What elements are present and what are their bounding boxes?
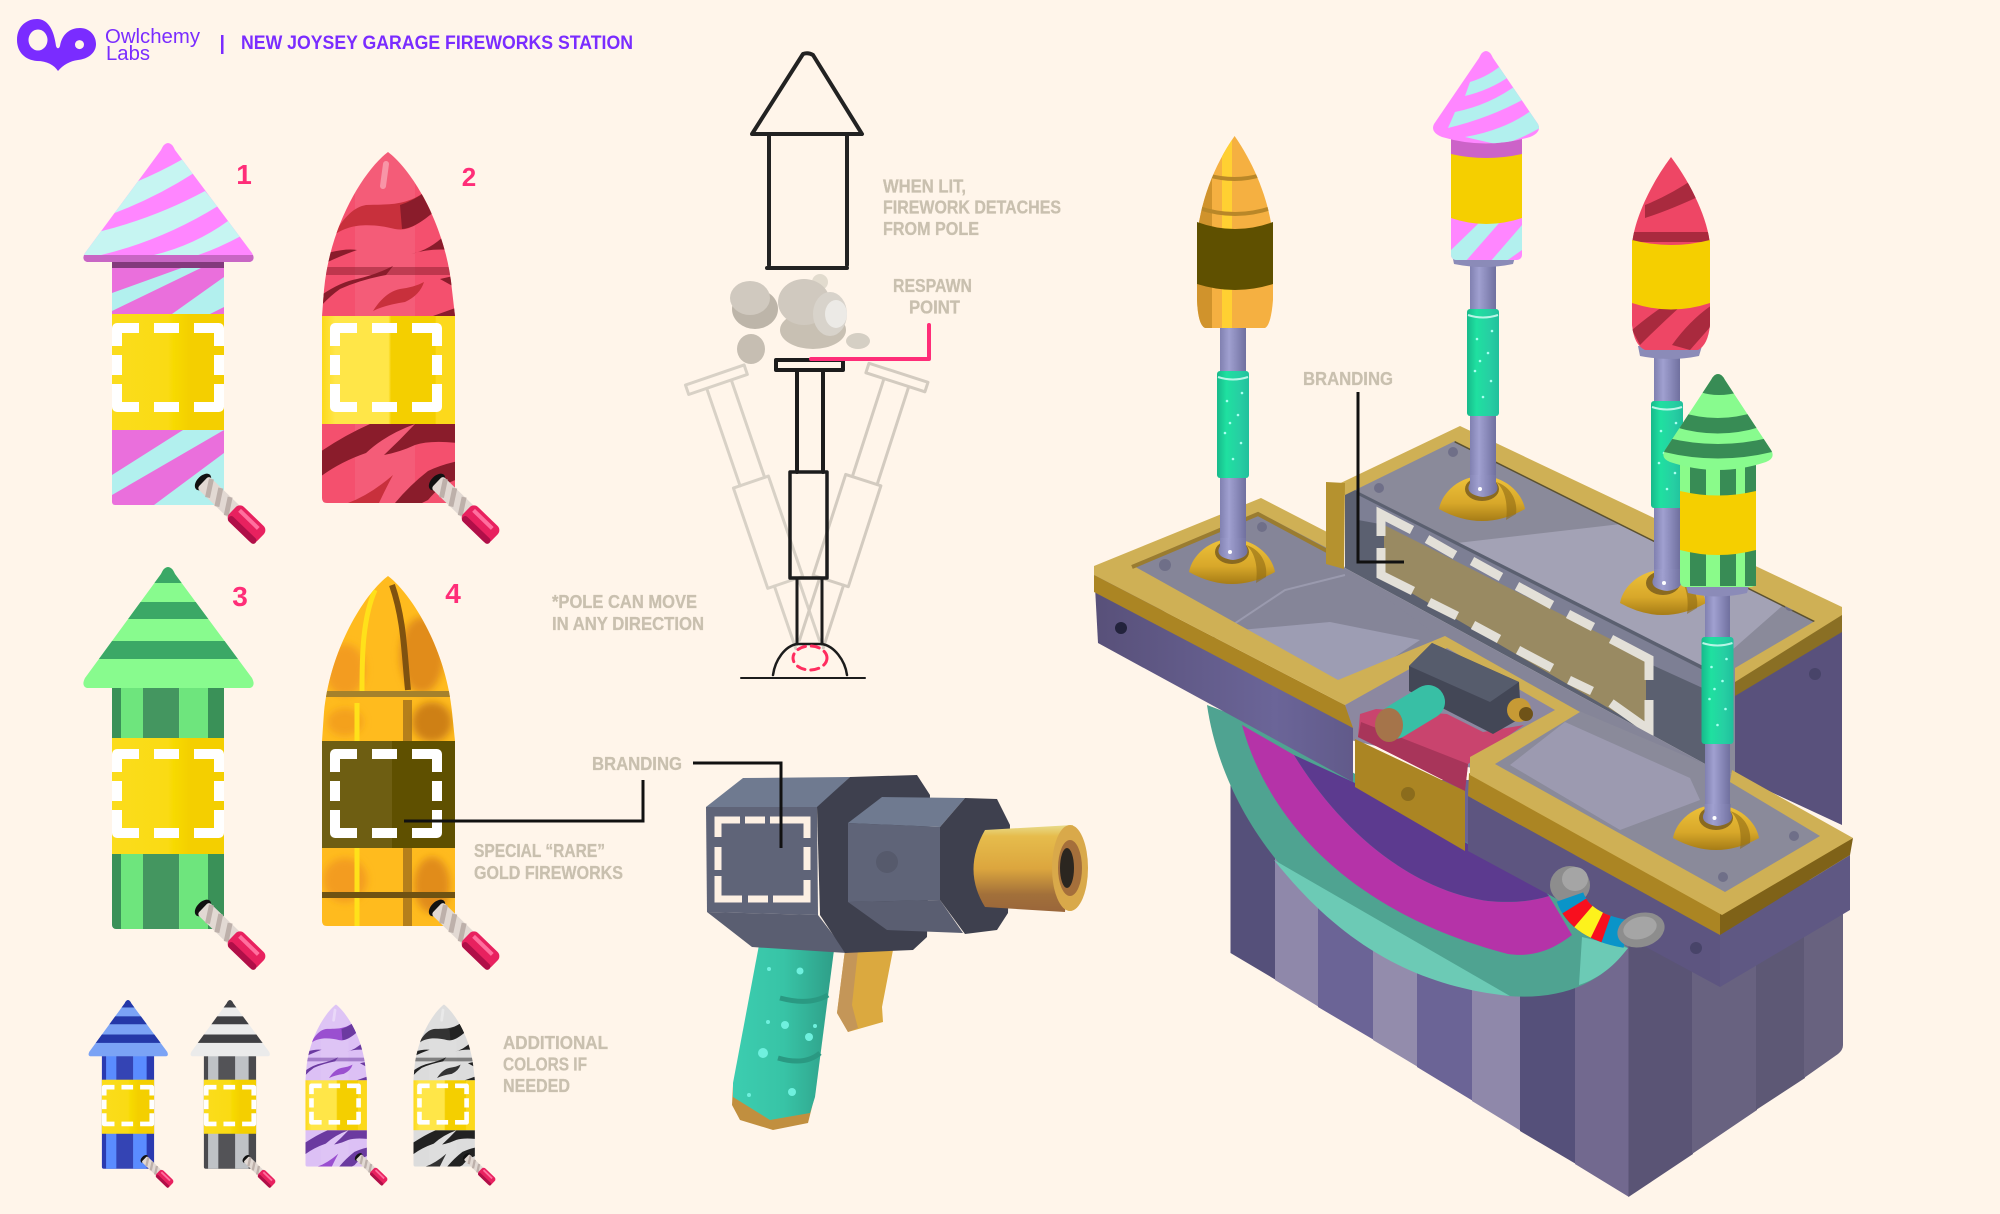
- title: NEW JOYSEY GARAGE FIREWORKS STATION: [241, 33, 633, 54]
- station rocket: pink on pole: [1433, 51, 1539, 521]
- station: deck backing along riser foot: [1345, 568, 1707, 770]
- note: when lit: WHEN LIT,: [883, 177, 966, 197]
- note: respawn point: RESPAWN: [893, 276, 972, 296]
- sketch: detached firework outline: [752, 53, 862, 268]
- gun: trigger: [837, 950, 893, 1032]
- firework launcher gun: [706, 775, 1088, 1130]
- sketch: ghost pole tilted right: [781, 363, 928, 654]
- station: left side face: [1094, 568, 1353, 782]
- station: gold frame: [1094, 426, 1853, 935]
- note: special rare gold fireworks: GOLD FIREWORKS: [474, 863, 623, 883]
- number 3: 3: [232, 581, 248, 612]
- callout line: gun branding: [693, 763, 781, 848]
- number 2: 2: [462, 162, 476, 192]
- station: notch and red firing pad: [1345, 646, 1560, 791]
- small variant: blue rocket: [87, 997, 175, 1188]
- note: additional colors: NEEDED: [503, 1076, 570, 1096]
- gun: mid block with screw: [848, 797, 1010, 934]
- callout line: station branding: [1358, 392, 1404, 562]
- note: pole can move: IN ANY DIRECTION: [552, 614, 704, 634]
- small variant: purple tiger rocket: [305, 1004, 389, 1186]
- station: mini launcher gun: [1375, 643, 1533, 742]
- note: additional colors: ADDITIONAL: [503, 1033, 608, 1053]
- station: gold drawer: [1355, 739, 1465, 851]
- station: left deck surface: [1100, 503, 1450, 705]
- firework station: [1094, 45, 1853, 1197]
- firework 3: green striped rocket: [80, 560, 268, 971]
- note: special rare gold fireworks: [474, 841, 623, 883]
- logo: Owlchemy Labs: Labs: [106, 43, 150, 65]
- note: additional colors: [503, 1033, 608, 1096]
- station: branding panel riser: [1345, 485, 1707, 765]
- note: special rare gold fireworks: SPECIAL “RARE”: [474, 841, 605, 861]
- note: branding on firework: BRANDING: [592, 754, 682, 774]
- station rocket: red on pole: [1620, 150, 1714, 615]
- smoke puff: [730, 274, 870, 364]
- station: right side faces: [1115, 622, 1850, 987]
- callout line: respawn point: [811, 325, 929, 359]
- small variant: zebra rocket: [413, 1004, 497, 1186]
- station rocket: gold on pole: [1189, 130, 1280, 584]
- logo: Owlchemy Labs: Owlchemy: [105, 26, 200, 48]
- gun: dark collar: [817, 775, 930, 953]
- gun: grip: [732, 945, 834, 1130]
- note: when lit: FROM POLE: [883, 219, 979, 239]
- note: respawn point: [893, 276, 972, 318]
- note: pole can move: *POLE CAN MOVE: [552, 592, 697, 612]
- firework 4: gold rare rocket: [320, 574, 502, 971]
- note: branding on station: BRANDING: [1303, 369, 1393, 389]
- firework 1: pink and cyan arrow rocket: [80, 140, 268, 545]
- sketch: respawn point ring: [793, 646, 827, 670]
- station rocket: green on pole: [1663, 374, 1773, 850]
- gun: brass barrel: [974, 825, 1088, 912]
- number 1: 1: [236, 159, 252, 190]
- station: rainbow arch: [1207, 705, 1628, 997]
- station: rear right side face: [1730, 610, 1842, 825]
- small variant: grey rocket: [189, 997, 277, 1188]
- sketch: upright pole: [741, 360, 865, 678]
- station: upper deck surface: [1345, 436, 1835, 775]
- station: rainbow tube: [1550, 866, 1669, 953]
- note: pole can move: [552, 592, 704, 634]
- station: right deck surface: [1478, 705, 1843, 900]
- station: striped lower base: [1230, 780, 1843, 1197]
- note: when lit: FIREWORK DETACHES: [883, 197, 1061, 217]
- callout line: firework branding: [404, 780, 643, 821]
- note: additional colors: COLORS IF: [503, 1054, 587, 1074]
- firework 2: red tiger rocket: [320, 150, 502, 545]
- sketch: ghost pole tilted left: [685, 365, 836, 655]
- number 4: 4: [445, 578, 461, 609]
- gun: rear block with branding area: [706, 777, 850, 953]
- logo: Owlchemy Labs: [17, 19, 200, 71]
- sketch: firework detaching from pole: [685, 53, 928, 678]
- note: when lit: [883, 177, 1061, 239]
- note: respawn point: POINT: [909, 298, 960, 318]
